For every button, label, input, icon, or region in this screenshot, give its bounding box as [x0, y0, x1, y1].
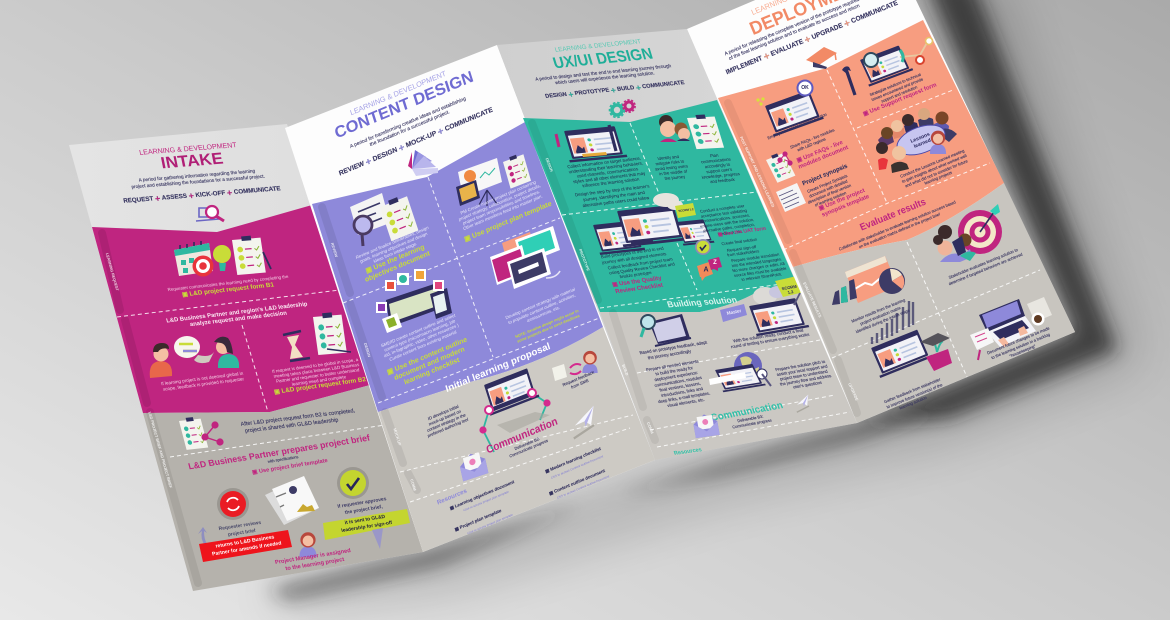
text: review deliverables: objectives document	[364, 249, 431, 283]
text: gather feedback: to improve future version(s) of the	[886, 381, 944, 409]
text: after form B2: After L&D project request form B2 is completed,	[240, 408, 356, 428]
text: design bullets	[566, 155, 654, 208]
text: prepare elements: to build the ready for	[654, 365, 694, 376]
text: design bullets: journey, identifying the main and	[581, 189, 646, 202]
text: share FAQs	[789, 127, 849, 171]
text: SME content outline: document and modern	[393, 346, 465, 382]
UX/UI side tabs: BUILD	[621, 364, 629, 376]
heading and text: communication B3: Deliverable B3:	[736, 413, 764, 423]
intake side tabs	[102, 233, 198, 583]
text: lessons learned meeting: learning projects	[923, 169, 953, 185]
icon: brief papers	[265, 476, 319, 525]
text: create final solution: from stakeholders	[726, 248, 760, 257]
resources list: Click to access project plan template	[463, 490, 509, 512]
heading: building solution: Building solution	[666, 295, 738, 309]
text: prepare elements: deployment experience:	[653, 370, 699, 382]
icon: keyboard laptop, notes and coffee	[970, 297, 1052, 360]
text: global request: If request is deemed to be global in scope, a	[271, 356, 359, 373]
UX/UI side tabs: COMM	[646, 422, 654, 434]
icon: prototype devices	[590, 204, 714, 254]
icon: checklist with share nodes	[765, 151, 795, 183]
text: after form B2: project is shared with GL&D leadership	[244, 417, 339, 435]
callout: sent to GL&D	[323, 509, 410, 540]
text: acceptance test: alternative paths, completion,	[702, 221, 755, 233]
icon: lessons learned group: learned	[913, 138, 932, 150]
heading and text: communication B3: Communication	[709, 400, 785, 424]
UX/UI grey section	[600, 285, 857, 460]
text: global request: Partner and requester to better understand	[275, 367, 360, 383]
text: ID develops mock-up: preferred authoring tool	[427, 416, 469, 438]
text: strategize solutions: issues encountered and provide	[870, 76, 924, 102]
text: share FAQs: Share FAQs - live modules	[789, 127, 835, 149]
text: prepare elements: deep links, e-mail templates,	[657, 390, 711, 404]
icon: lessons learned group	[876, 108, 957, 173]
UX/UI side tabs: PROTOTYPE	[578, 248, 590, 272]
text: analyze request: L&D Business Partner and region's L&D leadership	[166, 302, 309, 324]
icon: mock-up laptop with joints	[479, 367, 551, 452]
icon: translation bubbles: Z	[713, 260, 717, 266]
text: design bullets: alternative paths users could follow	[581, 195, 651, 208]
icon: envelope B3	[692, 413, 720, 438]
deployment steps: IMPLEMENT + EVALUATE + UPGRADE + COMMUNICATE	[724, 0, 900, 78]
panel 2 sheet	[285, 45, 655, 552]
text: ID develops mock-up: content strategy in the	[426, 411, 467, 432]
text: identify risks: in the middle of	[658, 168, 688, 176]
icon: cloud and SCORM tag	[753, 276, 804, 305]
text: review deliverables: ▣ Use the learning	[365, 243, 425, 275]
content design grey section	[378, 327, 655, 552]
icon: approval check circle	[337, 467, 369, 499]
text: ID develops mock-up: mock-up based on	[428, 408, 462, 426]
icon: cloud and SCORM tag: SCORM	[781, 283, 798, 291]
text: prepare translation: in relevant SharePoint.	[741, 271, 783, 281]
text: use quality checklist: ▣ Use the Quality	[611, 276, 663, 288]
text: prepare elements: visual elements, etc.	[666, 396, 705, 408]
text: design bullets: influence the learning solution	[581, 176, 640, 188]
deployment side tabs: EVALUATE RESULTS	[802, 282, 822, 319]
text: SME content outline: learning checklist	[403, 356, 461, 386]
text: stakeholder evaluates: Stakeholder evaluates learning solution to	[948, 246, 1019, 279]
text: build prototypes: Collect feedback from project team	[607, 256, 674, 270]
UX/UI teal section	[523, 100, 797, 312]
text: acceptance test: engine-mess with the solution,	[699, 216, 755, 228]
text: lessons learned meeting: and what did not to consider for future	[904, 158, 969, 188]
text: requester approves: the project brief,	[344, 503, 384, 515]
text: requester reviews: Requester reviews	[218, 519, 262, 532]
text: create final solution: Create final solution	[721, 236, 758, 246]
content design heading: CONTENT DESIGN	[332, 68, 476, 142]
text: review deliverables: goals, learning objectives and design	[359, 230, 428, 263]
heading: resources teal: Resources	[673, 447, 703, 457]
icon: synopsis document	[776, 183, 806, 212]
panel 1 sheet	[69, 124, 423, 591]
resources list: ▣ Content outline document	[548, 468, 606, 496]
text: create master plan: Other team members feed into master plan.	[462, 193, 543, 231]
intake grey section	[143, 385, 423, 591]
icon: checklist and share nodes	[178, 416, 224, 450]
icon: review checklist and magnifier	[350, 193, 418, 246]
heading: initial learning proposal: Initial learning proposal	[444, 341, 552, 395]
content design side tabs: REVIEW	[330, 242, 338, 258]
text: final testing: round of testing to ensure everything works	[730, 331, 810, 349]
text: plan communications: communications	[700, 156, 731, 164]
text: design bullets: styles and all other elements that may	[572, 170, 647, 184]
UX/UI heading: LEARNING & DEVELOPMENT	[554, 38, 642, 54]
text: project synopsis: document with detailed	[808, 178, 848, 198]
text: project manager assigned: Project Manager is assigned	[274, 548, 352, 566]
panel 3 sheet	[497, 29, 857, 460]
deployment side tabs: UPGRADE	[847, 383, 859, 402]
icon: envelope	[458, 450, 488, 481]
intake description: project and establishing the foundations for a successful project.	[131, 173, 265, 190]
heading: project brief: L&D Business Partner prepares project brief	[187, 433, 371, 471]
deployment side tabs	[728, 103, 859, 413]
icon: cloud and SCORM badge	[653, 193, 696, 218]
heading and text: evaluate results: on the evaluation matrix defined in the project brief	[858, 211, 941, 249]
text: acceptance test: Conduct a complete user	[699, 203, 746, 213]
text: strategize solutions: support and resolution	[880, 84, 918, 103]
text: plan communications: and feedback	[709, 176, 736, 184]
text: final testing: With the solution ready, conduct a final	[732, 327, 804, 343]
icon: adapt laptop and magnifier	[641, 314, 691, 346]
icon: request feedback from SME	[552, 351, 598, 381]
resources list	[436, 446, 610, 535]
text: design bullets: Design the step by step of the learner's	[574, 183, 651, 197]
text: develop strategy	[505, 286, 581, 344]
text: prepare pitch: assist your local support and	[776, 363, 829, 377]
icon: paper plane	[568, 406, 599, 438]
text: create master plan: PM Create master project plan containing	[460, 179, 537, 215]
intake heading	[139, 141, 238, 172]
callout: returns to business partner	[199, 530, 292, 562]
icon: master laptop	[720, 293, 809, 335]
text: develop strategy: some projects due to strict deadlines	[517, 314, 580, 344]
text: stakeholder evaluates: determine if targeted behaviors are achieved	[948, 251, 1023, 286]
text: global request	[271, 356, 367, 396]
icon: hourglass and checklist	[283, 312, 351, 361]
intake side tabs: L&D PROJECT BRIEF AND PROJECT BRIEF	[147, 411, 173, 489]
text: identify risks: Identify and	[657, 153, 680, 160]
text: project synopsis: ▣ Use the project	[818, 188, 866, 212]
text: SME content outline	[380, 312, 473, 391]
text: monitor results: project evaluation matrix	[859, 305, 901, 326]
text: create master plan: project team responsibilities and timelines.	[462, 188, 540, 225]
text: build prototypes: finalize prototype	[619, 269, 653, 279]
icon: upgrade laptop, bars, plant and cap	[868, 301, 952, 377]
icon: teal check badge	[695, 239, 711, 255]
text: identify risks: the journey	[664, 173, 686, 180]
text: identify risks: mitigate risks to	[655, 158, 685, 166]
text: identify risks: avoid losing users	[654, 163, 689, 171]
text: develop strategy: NOTE: iterative design might occur in	[515, 309, 580, 339]
intake magenta section	[92, 205, 370, 413]
text: review deliverables	[355, 224, 433, 283]
icon: globe and links	[709, 352, 771, 391]
text: document future changes: "housekeeping"	[1009, 343, 1037, 358]
deployment description: of the final learning solution and to evaluate its success and return	[728, 2, 861, 62]
text: SME content outline: Curate content from existing material	[389, 329, 457, 362]
icon: colour fan	[408, 150, 438, 176]
text: project synopsis: of learning solution	[814, 190, 847, 207]
UX/UI steps: DESIGN + PROTOTYPE + BUILD + COMMUNICATE	[544, 78, 686, 102]
shadow cast by the folded brochure	[262, 0, 1140, 612]
text: adapt journey: Based on prototype feedback, adapt	[639, 339, 708, 355]
icon: OK laptop and badge: OK	[801, 85, 809, 91]
text: global request: meeting takes place between L&D Business	[273, 361, 360, 378]
text: SME content outline: content type (micro/macro learning, job	[383, 318, 456, 352]
text: prepare pitch: project team to understand	[779, 368, 829, 381]
icon: cloud and SCORM tag: 1.2	[787, 288, 795, 294]
text: requester reviews: project brief	[227, 527, 257, 538]
text: share FAQs: with L&D regions	[796, 136, 826, 152]
text: acceptance test: ▣ Use the UAT form	[717, 226, 767, 238]
text: project synopsis: Create Project Synopsis	[806, 173, 848, 193]
text: request feedback: from SME	[570, 377, 589, 389]
icon: learners and checklist	[659, 114, 724, 149]
text: build prototypes: journey with all designed elements	[600, 251, 667, 265]
UX/UI side tabs	[532, 123, 655, 440]
text: project synopsis: description of final version	[807, 182, 852, 204]
text: prepare translation: No more changes or edits. All	[731, 261, 785, 273]
UX/UI heading: UX/UI DESIGN	[551, 46, 655, 72]
text: acceptance test: feedback, etc.	[717, 228, 743, 236]
icon: laptop and magnifier	[196, 206, 224, 221]
heading and text: communication B3: Communicate progress	[731, 417, 772, 429]
resources list: ▣ Learning objectives document	[449, 479, 515, 511]
text: requester communicates: ▣ L&D project request form B1	[181, 281, 275, 298]
text: prepare elements: introductions, links and	[660, 385, 704, 397]
intake description: A period for gathering information regarding the learning	[138, 168, 256, 183]
icon: lessons learned group: Lessons	[910, 131, 931, 145]
text: acceptance test: acceptance test validating	[700, 207, 748, 218]
icon: calendar, target, bulb, checklist	[174, 235, 271, 276]
text: design bullets: Collect information on target audience,	[566, 155, 642, 169]
icon: paper plane B3	[793, 395, 812, 412]
text: prepare pitch: user's questions	[792, 379, 822, 389]
icon: results chart	[832, 256, 905, 305]
icon: OK laptop and badge	[756, 80, 823, 136]
text: prepare elements: communications, modules	[653, 374, 702, 387]
text: prepare translation: Prepare module translation	[730, 251, 780, 263]
heading and text: communication: Deliverable B2:	[514, 435, 540, 451]
content design description: the foundation for a successful project.	[369, 109, 450, 148]
text: create master plan	[456, 177, 553, 244]
text: develop strategy: to populate content outline, activities,	[507, 292, 576, 325]
text: prepare pitch: Prepare the solution pitch to	[774, 358, 826, 372]
text: monitor results: Monitor results from the learning	[850, 297, 906, 323]
content design purple section	[312, 122, 603, 412]
intake steps: REQUEST + ASSESS + KICK-OFF + COMMUNICATE	[122, 184, 282, 206]
text: lessons learned meeting: to gain insights about what worked well	[901, 152, 967, 183]
text: review deliverables: Review and finalize deliverables, design	[355, 224, 430, 260]
panel: UX/UI design	[497, 29, 857, 460]
content design side tabs	[322, 207, 417, 491]
text: SME content outline: SME/ID create content outline and select	[380, 312, 457, 348]
text: build prototypes: Build prototypes of the end to end	[600, 245, 665, 259]
icon: red review circle	[217, 488, 249, 520]
panel: intake	[69, 124, 423, 591]
panel 4 sheet	[687, 0, 1075, 423]
text: review deliverables: ideas from intake stage.	[373, 240, 418, 263]
heading and text: evaluate results: Evaluate results	[858, 197, 928, 233]
intake heading: INTAKE	[159, 150, 225, 172]
resources list: Click to access project plan template	[467, 513, 513, 535]
text: design bullets: understanding their learning behaviors,	[568, 160, 644, 174]
text: create master plan: project strategy, collaboration, project details,	[458, 182, 541, 221]
icon: graduation cap	[806, 47, 837, 69]
UX/UI description: A period to design and test the end to end learning journey through	[534, 63, 672, 81]
text: requester approves: If requester approves	[337, 496, 387, 509]
text: prepare pitch: the journey flow and address	[779, 373, 832, 386]
text: plan communications: knowledge, progress	[701, 171, 740, 179]
text: requester communicates: Requester communicates the learning need by completing the	[167, 274, 289, 292]
icon: two people talking	[150, 336, 239, 378]
text: gather feedback: learning solution	[898, 394, 927, 410]
text: employees access: Employees access learning solution	[767, 112, 827, 140]
text: document future changes: Document future changes to be made	[986, 325, 1051, 355]
text: global request: learning need and complete	[291, 374, 347, 386]
text: build prototypes: using Quality Review Checklist and	[608, 261, 676, 275]
text: not global: If learning project is not deemed global in	[160, 370, 244, 386]
resources list: Click to access Content Outline Document	[550, 454, 604, 480]
text: ID develops mock-up: ID develops initial	[427, 403, 459, 421]
icon: translation bubbles	[697, 257, 722, 281]
text: strategize solutions: ▣ Use Support request form	[862, 82, 938, 118]
text: lessons learned meeting: Conduct the Lessons Learned meeting	[899, 148, 965, 178]
text: analyze request: analyze request and make decision	[189, 311, 288, 328]
UX/UI side tabs: DESIGN	[545, 158, 554, 173]
text: acceptance test	[694, 202, 767, 238]
icon: wrench, laptop and nodes	[842, 38, 932, 95]
text: document future changes: to the learning solution in a backlog	[990, 331, 1050, 360]
text: design bullets: used channels, communications	[576, 166, 639, 178]
content design heading: LEARNING & DEVELOPMENT	[349, 69, 448, 117]
panel: deployment	[687, 0, 1075, 423]
heading: project brief: ▣ Use project brief template	[251, 458, 329, 476]
content design description: A period for transforming creative ideas and establishing	[349, 96, 467, 150]
text: prepare elements: final versions, lessons,	[658, 380, 701, 392]
deployment salmon section	[718, 20, 1004, 267]
icon: translation bubbles: A	[703, 266, 709, 274]
resources list: Resources	[436, 487, 468, 506]
icon: strategy screens	[490, 226, 560, 289]
callout: returns to business partner: returns to L&D Business	[215, 534, 275, 550]
text: share FAQs: ▣ Use FAQs - live	[796, 140, 845, 164]
text: create final solution: Request sign-off	[726, 244, 758, 252]
heading: project brief: with specifications	[267, 454, 299, 464]
icon: project manager	[299, 532, 317, 557]
text: develop strategy: assessments, etc.	[526, 304, 560, 323]
heading and text: communication: Communicate progress	[509, 437, 548, 458]
text: project synopsis: synopsis template	[821, 194, 871, 219]
icon: laptop, tools and pen	[556, 125, 627, 161]
icon: master laptop: Master	[726, 308, 742, 316]
text: strategize solutions: Strategize solutions to technical	[869, 71, 921, 97]
text: project synopsis: Project synopsis	[801, 162, 849, 187]
text: acceptance test: communications, accesses,	[700, 212, 751, 223]
text: request feedback: Request feedback	[562, 369, 595, 387]
icon: presentation board, tablet, checklist	[456, 152, 531, 206]
text: prepare translation: source files must be available	[733, 265, 788, 277]
content design side tabs: DESIGN	[363, 343, 371, 358]
panel: content design	[285, 45, 655, 552]
content design side tabs: MOCK-UP	[392, 428, 402, 447]
intake side tabs: LEARNING REQUEST	[105, 253, 119, 292]
icon: down arrow	[372, 528, 383, 549]
text: plan communications: Plan	[709, 152, 720, 158]
resources list: ▣ Modern learning checklist	[545, 446, 602, 474]
text: gather feedback: Gather feedback from stakeholder	[883, 376, 942, 404]
text: use quality checklist: Review Checklist	[615, 283, 664, 295]
icon: content design cards and monitor	[376, 269, 452, 333]
text: prepare elements: Prepare all needed elements	[645, 358, 699, 372]
icon: cloud and SCORM badge: SCORM 1.2	[678, 207, 694, 213]
resources list: ▣ Project plan template	[454, 508, 502, 532]
text: not global: scope, feedback is provided to requester	[162, 376, 245, 391]
icon: return arrow	[198, 527, 207, 546]
text: project manager assigned: to the learning project	[285, 557, 345, 572]
deployment grey section	[793, 183, 1075, 423]
callout: sent to GL&D: it is sent to GL&D	[344, 513, 386, 526]
deployment side tabs: POST SUPPORT AND LESSONS LEARNED	[739, 136, 775, 208]
icon: gears	[610, 100, 635, 118]
text: global request: ▣ L&D project request form B2	[273, 376, 367, 396]
text: adapt journey: the journey accordingly	[647, 348, 692, 360]
text: create master plan: ▣ Use project plan template	[463, 200, 553, 244]
text: prepare translation: into the intended languages.	[731, 256, 783, 268]
text: build prototypes	[598, 245, 678, 280]
icon: target and stakeholders	[933, 204, 1002, 262]
heading and text: communication: Communication	[485, 415, 559, 457]
text: monitor results: identified during the intake stage	[855, 307, 911, 334]
content design steps: REVIEW + DESIGN + MOCK-UP + COMMUNICATE	[338, 104, 495, 179]
heading and text: evaluate results: Collaborate with stakeholder to evaluate learning solution success based	[838, 199, 956, 251]
UX/UI description: which users will experience the learning solution.	[554, 70, 655, 85]
callout: returns to business partner: Partner for amends if needed	[212, 541, 282, 557]
text: plan communications: support user's	[705, 166, 733, 174]
text: plan communications: accordingly to	[704, 161, 731, 169]
content design side tabs: COMM	[409, 479, 417, 491]
intake heading: LEARNING & DEVELOPMENT	[139, 141, 238, 157]
resources list: Click to access Content Outline Document	[556, 474, 610, 500]
text: project synopsis	[801, 162, 871, 219]
text: develop strategy: Develop content strategy with material	[505, 286, 575, 320]
text: share FAQs: modules document	[798, 145, 849, 171]
text: SME content outline: ▣ Use the content outline	[386, 336, 468, 376]
text: SME content outline: aid, in-fographic, video, other resources )	[383, 322, 460, 358]
callout: sent to GL&D: leadership for sign-off	[341, 519, 393, 533]
